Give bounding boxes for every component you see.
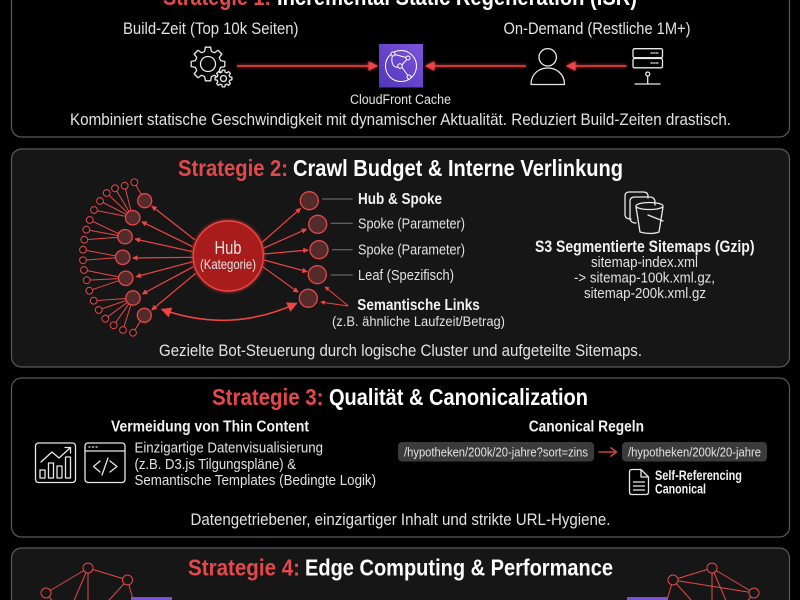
heading: Strategie 4: Edge Computing & Performance (305, 554, 613, 580)
heading: Strategie 3 (212, 384, 588, 410)
panel: Strategie 4 (12, 548, 790, 600)
arrow: canonical (598, 448, 616, 456)
text: Strategie 2 summary: Gezielte Bot-Steuerung durch logische Cluster und aufgeteilte Sitemaps. (159, 342, 642, 360)
label: Semantische Links: Semantische Links (357, 297, 480, 314)
panel: Strategie 1 (12, 0, 790, 137)
heading: Strategie 3: Strategie 3: (212, 384, 324, 410)
text: sitemap index: sitemap-200k.xml.gz (584, 286, 706, 302)
subheading: Thin Content: Vermeidung von Thin Content (111, 419, 310, 436)
heading: Strategie 4: Strategie 4: (188, 554, 300, 580)
arrow: server to user (567, 65, 626, 67)
arrow: build to cache (237, 65, 377, 67)
text: sitemap index: sitemap-index.xml (591, 255, 698, 271)
icon: server (633, 49, 662, 84)
arrow: user to cache (426, 65, 526, 67)
text: Strategie 1 summary: Kombiniert statische Geschwindigkeit mit dynamischer Aktualität. Reduziert Build-Zeiten drastisch. (70, 111, 731, 129)
pill: canonical URL: /hypotheken/200k/20-jahre (628, 444, 761, 460)
heading: Strategie 1 (163, 0, 637, 10)
label: On-Demand: On-Demand (Restliche 1M+) (504, 20, 690, 38)
pill: canonical URL (622, 442, 767, 462)
label: Spoke 1: Spoke (Parameter) (358, 216, 465, 232)
icon: right purple tile (627, 597, 668, 600)
icon: chart (36, 443, 76, 482)
heading: S3 sitemaps: S3 Segmentierte Sitemaps (Gzip) (535, 237, 754, 256)
hub node: Hub (214, 238, 242, 258)
text: thin content detail: Semantische Templates (Bedingte Logik) (134, 472, 376, 489)
icon: CloudFront (379, 44, 423, 88)
panel: Strategie 2 (12, 149, 790, 367)
icon: user (531, 49, 564, 84)
spoke nodes (116, 192, 328, 322)
label: semantic links detail: (z.B. ähnliche Laufzeit/Betrag) (332, 314, 505, 329)
hub arrows (133, 206, 308, 310)
panel: Strategie 3 (12, 378, 790, 537)
hub node (193, 221, 263, 291)
text: thin content detail: (z.B. D3.js Tilgungspläne) & (134, 456, 296, 473)
arrows: semantic links (321, 287, 348, 306)
diagram: hub and spoke graph (80, 179, 328, 336)
icon: document (630, 470, 648, 494)
icon: S3 buckets (625, 192, 663, 234)
heading: Strategie 2 (178, 155, 623, 181)
pill: source URL: /hypotheken/200k/20-jahre?sort=zins (404, 444, 588, 460)
pill: source URL (398, 442, 594, 462)
label: Leaf: Leaf (Spezifisch) (358, 268, 454, 284)
diagram: left edge network (41, 563, 136, 600)
leaf nodes (80, 179, 138, 336)
heading: Strategie 4 (188, 554, 613, 580)
text: Strategie 3 summary: Datengetriebener, einzigartiger Inhalt und strikte URL-Hygiene. (190, 511, 610, 529)
leaf links (83, 182, 145, 333)
text: sitemap index: -> sitemap-100k.xml.gz, (574, 270, 715, 286)
heading: Strategie 3: Qualität & Canonicalization (329, 384, 588, 410)
label: Self-Referencing Canonical (655, 468, 742, 496)
icon: left purple tile (131, 597, 172, 600)
label: Build-Zeit: Build-Zeit (Top 10k Seiten) (123, 20, 298, 38)
icon: gears (191, 47, 232, 87)
text: thin content detail (134, 440, 376, 489)
text: thin content detail: Einzigartige Datenvisualisierung (134, 440, 323, 457)
heading: Strategie 2: Crawl Budget & Interne Verlinkung (293, 155, 623, 181)
diagram: right edge network (664, 563, 759, 600)
heading: Strategie 2: Strategie 2: (178, 155, 288, 181)
icon: code window (85, 443, 125, 482)
curved arrow (162, 303, 297, 320)
subheading: Canonical Regeln: Canonical Regeln (529, 419, 644, 436)
text: sitemap index (574, 255, 715, 302)
label: Spoke 2: Spoke (Parameter) (358, 242, 465, 258)
hub node: (Kategorie) (200, 256, 256, 272)
label: Hub & Spoke: Hub & Spoke (358, 191, 442, 208)
label: CloudFront Cache: CloudFront Cache (350, 92, 451, 107)
label: Self-Referencing Canonical: Canonical (655, 482, 706, 496)
label: Self-Referencing Canonical: Self-Referencing (655, 468, 742, 483)
